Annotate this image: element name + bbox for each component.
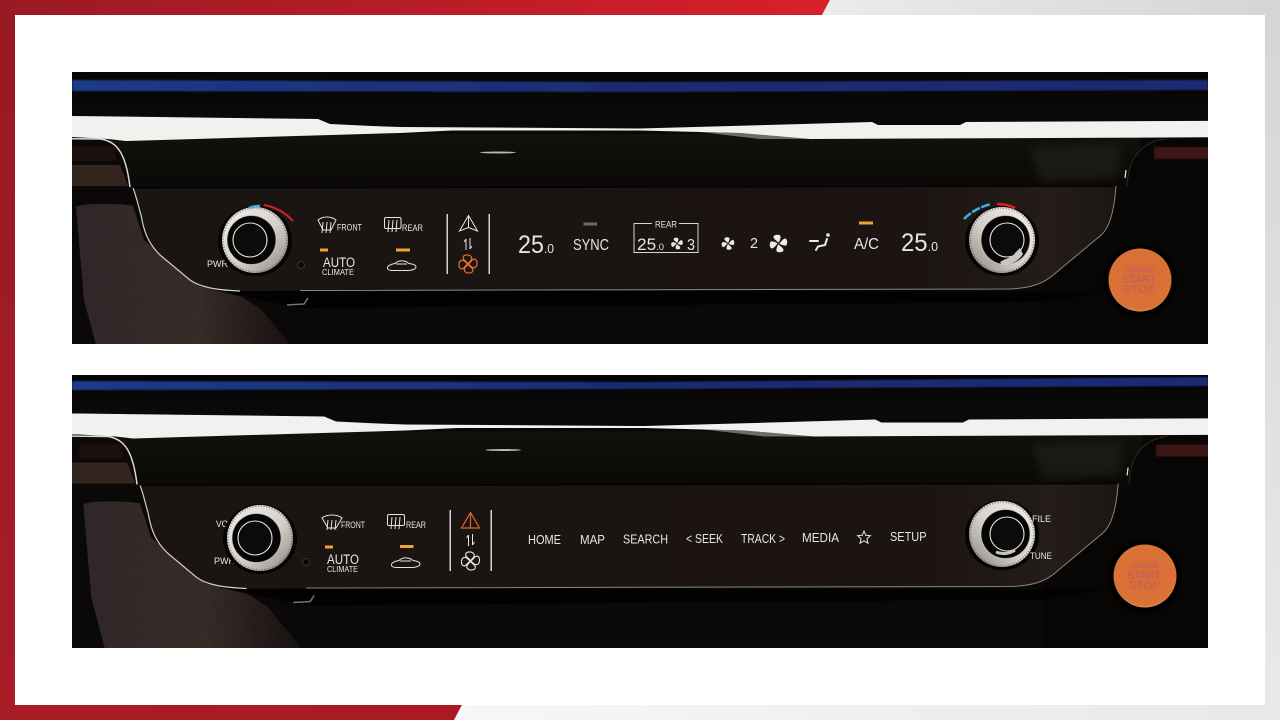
icon: front defrost xyxy=(322,515,342,530)
indicator: cabin amber xyxy=(396,248,410,252)
icon: seat airflow xyxy=(810,234,829,250)
frame: left red bar xyxy=(0,0,15,720)
left temperature knob xyxy=(218,206,292,276)
rear box outline xyxy=(634,224,698,252)
divider right xyxy=(490,510,492,571)
left temperature 25.0: 25.0 xyxy=(518,231,554,259)
frame: top gray bar xyxy=(822,0,1280,15)
menu: MEDIA: MEDIA xyxy=(802,531,840,545)
indicator hole xyxy=(298,262,304,268)
label: FILE: FILE xyxy=(1032,514,1051,525)
icon: up down arrows xyxy=(466,534,474,546)
frame: bottom red bar xyxy=(0,705,462,720)
divider right xyxy=(488,214,490,274)
indicator hole xyxy=(302,558,310,566)
rear fan speed: 3 xyxy=(687,237,695,254)
right tune knob xyxy=(965,500,1039,570)
right knob red arc xyxy=(997,204,1015,208)
icon: white fan xyxy=(461,552,480,570)
icon: car recirculation xyxy=(387,261,416,270)
icon: orange fan xyxy=(459,255,477,273)
button text: START: START xyxy=(1122,274,1156,286)
icon: small fan xyxy=(722,237,734,250)
left knob blue arc xyxy=(249,206,260,208)
label: FRONT: FRONT xyxy=(341,520,365,530)
button text: ENGINE: ENGINE xyxy=(1132,563,1160,570)
button shadow xyxy=(1108,540,1182,614)
fan speed 2: 2 xyxy=(750,235,758,252)
label: CLIMATE: CLIMATE xyxy=(322,267,354,277)
frame: bottom gray bar xyxy=(454,705,1280,720)
divider left xyxy=(450,510,451,571)
right temperature 25.0: 25.0 xyxy=(901,229,938,257)
menu: SETUP: SETUP xyxy=(890,530,926,544)
menu: TRACK: TRACK > xyxy=(741,532,785,546)
indicator: auto amber xyxy=(320,248,328,252)
menu: MAP: MAP xyxy=(580,533,605,547)
button text: STOP: STOP xyxy=(1124,284,1155,296)
ambient blue light strip xyxy=(72,80,1208,92)
label: A/C: A/C xyxy=(854,236,879,253)
panel: media mode photo xyxy=(8,348,1280,678)
ambient blue light strip xyxy=(72,377,1208,390)
left volume knob xyxy=(223,504,297,574)
indicator: cabin amber xyxy=(400,545,414,548)
label: SYNC: SYNC xyxy=(573,237,609,254)
button face xyxy=(1114,544,1176,608)
button face xyxy=(1108,248,1172,312)
panel: climate mode photo xyxy=(72,72,1208,344)
indicator: auto amber xyxy=(325,546,333,548)
icon: car recirculation xyxy=(391,558,420,568)
button text: START: START xyxy=(1127,570,1161,582)
icon: star xyxy=(858,531,870,543)
label: TUNE: TUNE xyxy=(1030,551,1052,562)
rear box label: REAR xyxy=(655,220,677,230)
label: AUTO: AUTO xyxy=(327,552,359,567)
rear climate box xyxy=(634,220,698,254)
right temperature knob xyxy=(965,206,1039,276)
icon: rear defrost xyxy=(388,514,404,529)
frame: top red bar xyxy=(0,0,830,15)
button shadow xyxy=(1103,244,1177,318)
divider left xyxy=(446,214,448,274)
label: FRONT: FRONT xyxy=(337,222,362,232)
icon: rear defrost xyxy=(384,218,401,232)
icon: front defrost xyxy=(318,217,336,233)
icon: up down arrows xyxy=(464,238,472,250)
right knob seat icon xyxy=(1000,248,1023,265)
icon: orange navigation triangle xyxy=(462,512,480,528)
rear temperature: 25.0 xyxy=(637,236,664,254)
rear fan icon xyxy=(671,238,683,249)
frame: right gray bar xyxy=(1265,0,1280,720)
label: CLIMATE: CLIMATE xyxy=(327,564,358,574)
label: REAR: REAR xyxy=(402,223,423,233)
indicator: A/C amber xyxy=(859,222,873,224)
label: VOL: VOL xyxy=(216,519,233,530)
label: PWR: PWR xyxy=(214,556,235,567)
right knob blue arc xyxy=(964,204,991,219)
button text: ENGINE: ENGINE xyxy=(1127,267,1155,274)
button text: STOP: STOP xyxy=(1129,580,1160,592)
menu: SEARCH: SEARCH xyxy=(623,532,668,546)
menu: HOME: HOME xyxy=(528,533,561,547)
right knob lower highlight xyxy=(996,550,1015,554)
indicator: sync gray xyxy=(584,222,597,226)
left knob red arc xyxy=(264,205,293,221)
label: AUTO: AUTO xyxy=(323,255,355,270)
icon: large fan xyxy=(770,235,787,252)
start stop button xyxy=(1108,540,1182,614)
menu: SEEK: < SEEK xyxy=(686,532,724,546)
label: PWR: PWR xyxy=(207,259,228,270)
icon: navigation triangle xyxy=(460,216,478,231)
start stop button xyxy=(1103,244,1177,318)
label: REAR: REAR xyxy=(406,520,426,530)
